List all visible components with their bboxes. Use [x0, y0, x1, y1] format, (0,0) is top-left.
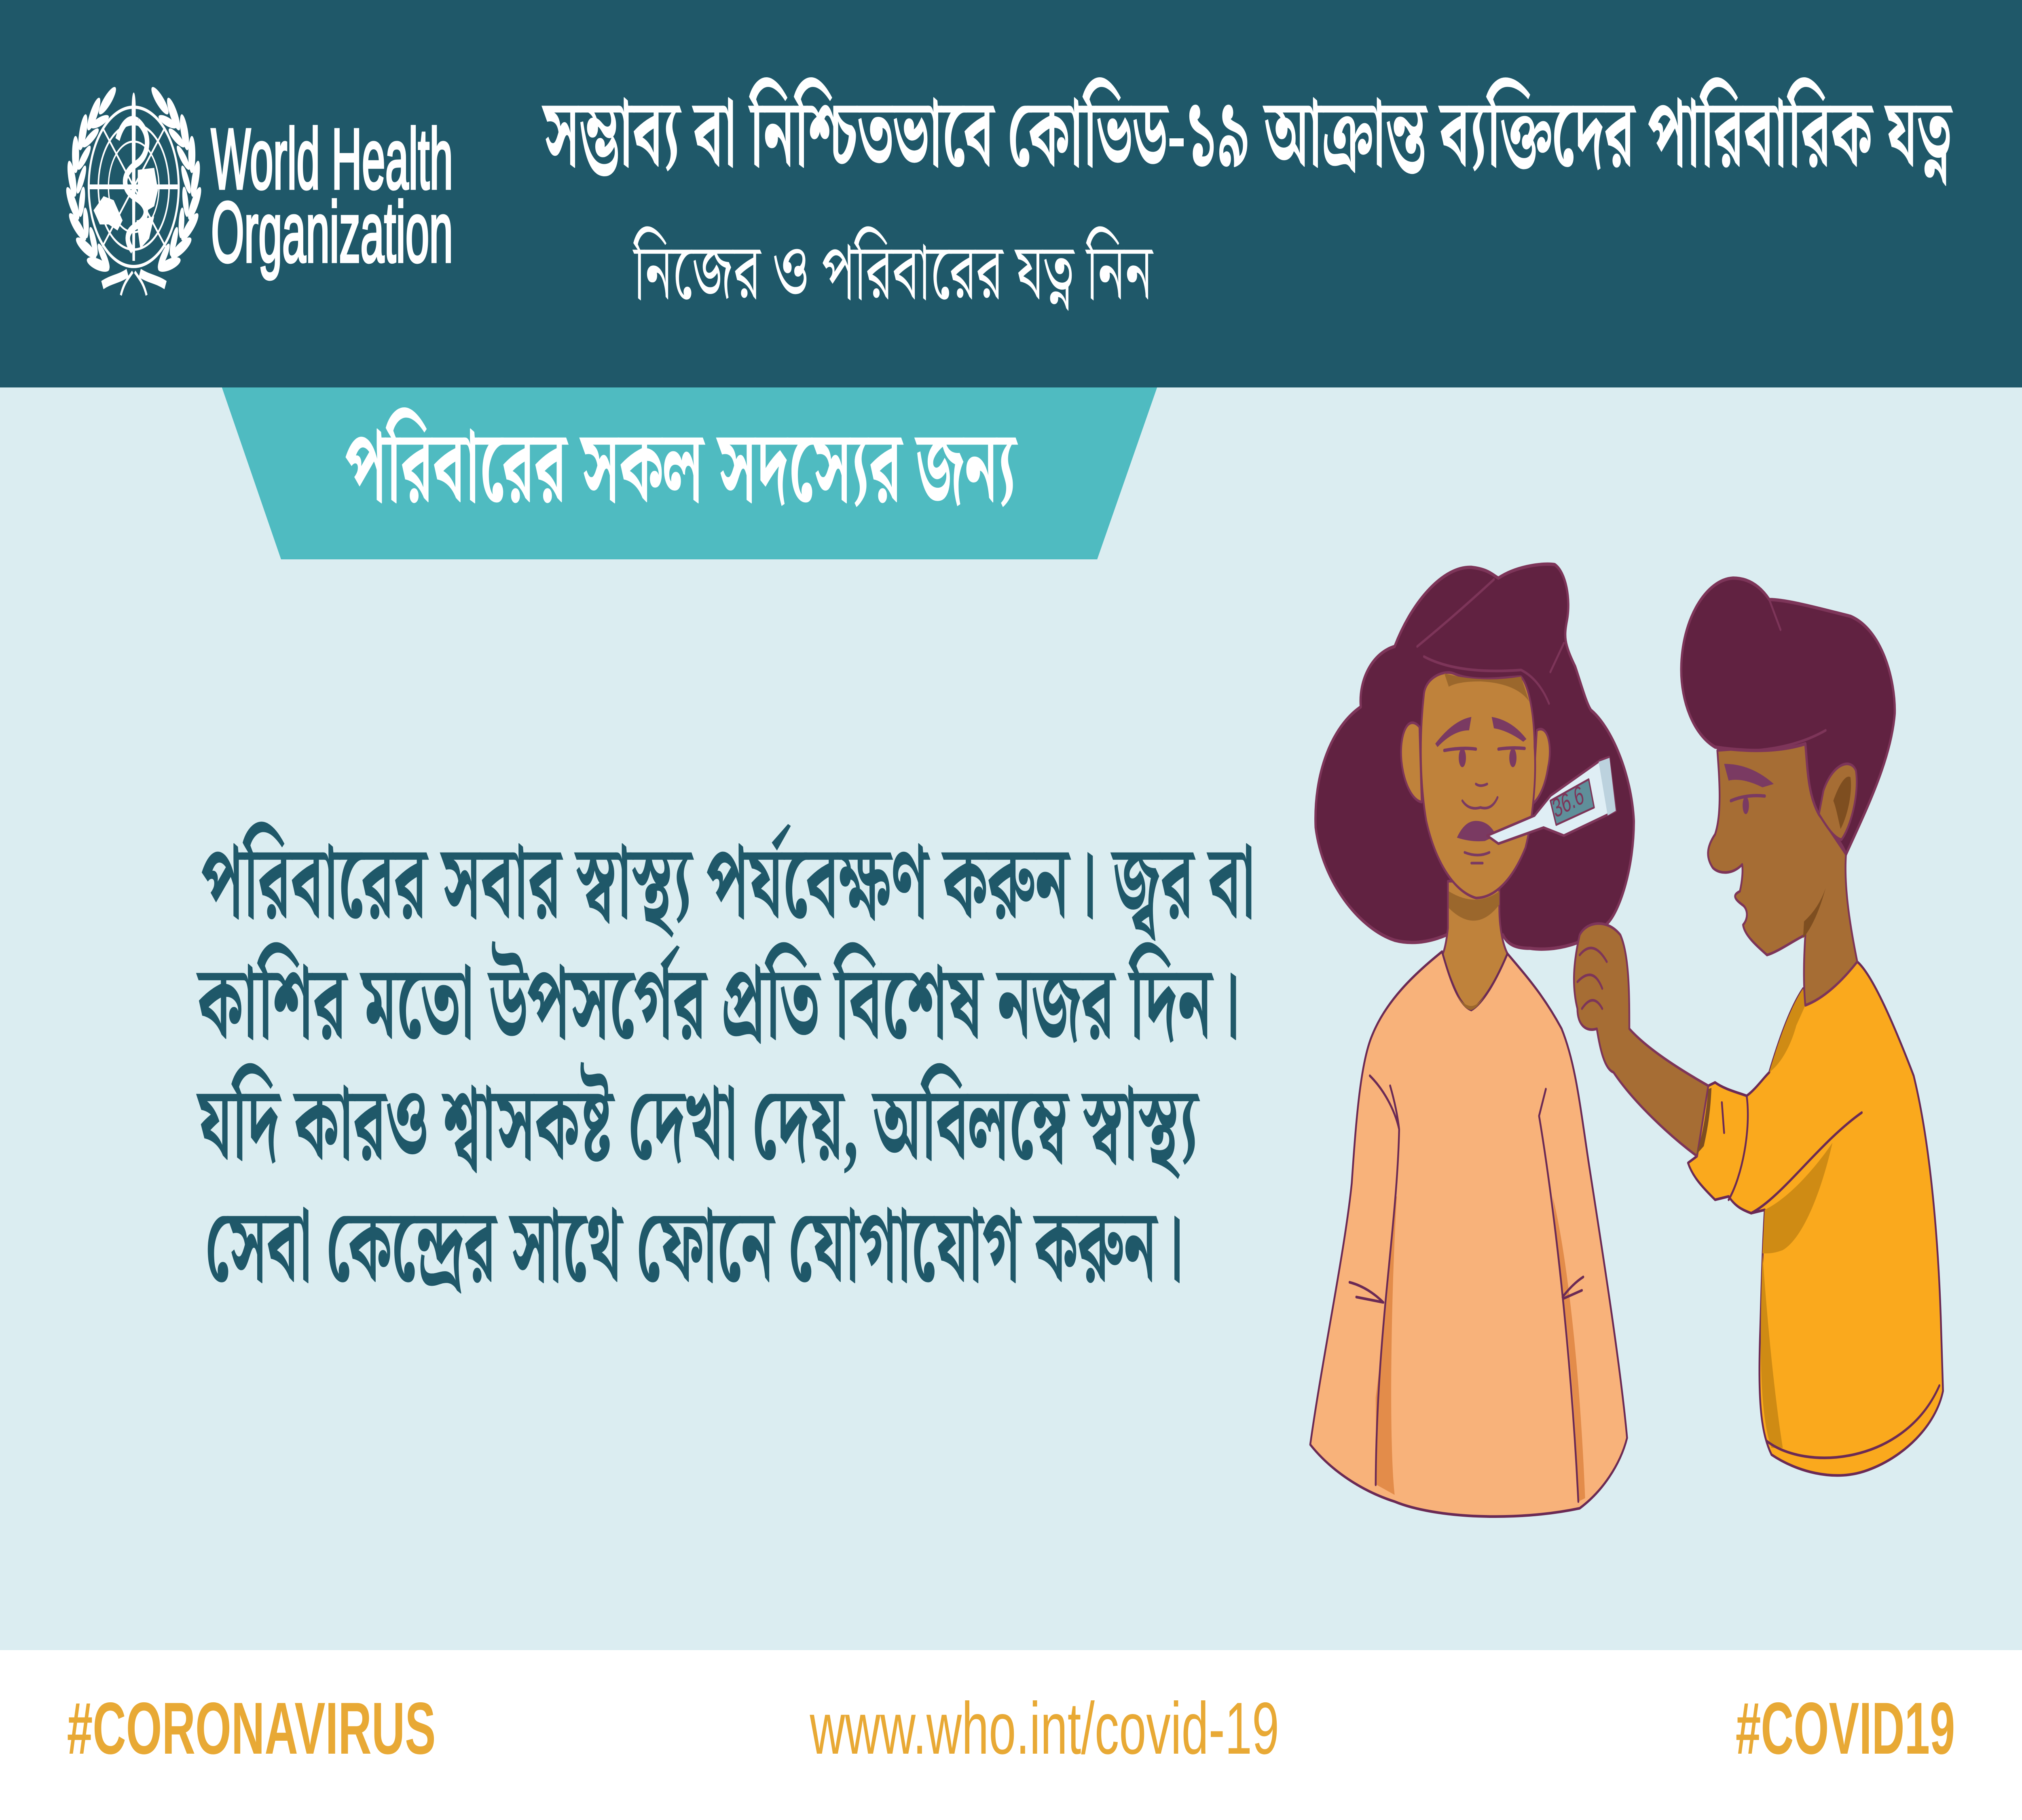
body text block [196, 821, 1255, 1302]
icon: WHO emblem [64, 84, 203, 295]
patient neck [1442, 881, 1508, 1012]
body text block: কাশির মতো উপসর্গের প্রতি বিশেষ নজর দিন। [196, 941, 1241, 1059]
caregiver arm and hand [1574, 923, 1708, 1156]
patient shirt [1310, 952, 1627, 1517]
footer text: #CORONAVIRUS [67, 1688, 436, 1770]
footer text: #COVID19 [1736, 1688, 1955, 1770]
patient ears [1401, 723, 1422, 802]
panel: teal section banner [222, 387, 1157, 559]
icon: thermometer [1487, 757, 1616, 844]
caregiver ear [1819, 764, 1857, 840]
footer text [67, 1688, 1955, 1770]
patient hair [1316, 564, 1634, 949]
subtitle: নিজের ও পরিবারের যত্ন নিন [632, 226, 1154, 315]
icon: thermometer: 36.6 [1550, 780, 1586, 824]
footer text: www.who.int/covid-19 [810, 1688, 1279, 1770]
body text block: যদি কারও শ্বাসকষ্ট দেখা দেয়, অবিলম্বে স্বাস্থ্য [196, 1062, 1200, 1180]
body text block: সেবা কেন্দ্রের সাথে ফোনে যোগাযোগ করুন। [205, 1189, 1184, 1302]
person: caregiver [1574, 578, 1943, 1475]
logo text: World Health Organization [211, 111, 453, 280]
title: সম্ভাব্য বা নিশ্চিতভাবে কোভিড-১৯ আক্রান্ত ব্যক্তিদের পারিবারিক যত্ন [541, 77, 1953, 186]
illustration: two people, thermometer [1310, 564, 1943, 1517]
footer band [0, 1650, 2022, 1820]
logo text: World Health Organization: World Health [211, 111, 453, 207]
header band [0, 0, 2022, 387]
body text block: পরিবারের সবার স্বাস্থ্য পর্যবেক্ষণ করুন। জ্বর বা [202, 821, 1255, 941]
logo text: World Health Organization: Organization [211, 184, 453, 280]
person: patient [1310, 564, 1634, 1517]
patient face [1421, 673, 1535, 898]
caregiver hair [1681, 578, 1895, 855]
caregiver shirt [1688, 962, 1943, 1475]
caregiver head [1708, 744, 1857, 1005]
banner heading: পরিবারের সকল সদস্যের জন্য [345, 407, 1018, 522]
